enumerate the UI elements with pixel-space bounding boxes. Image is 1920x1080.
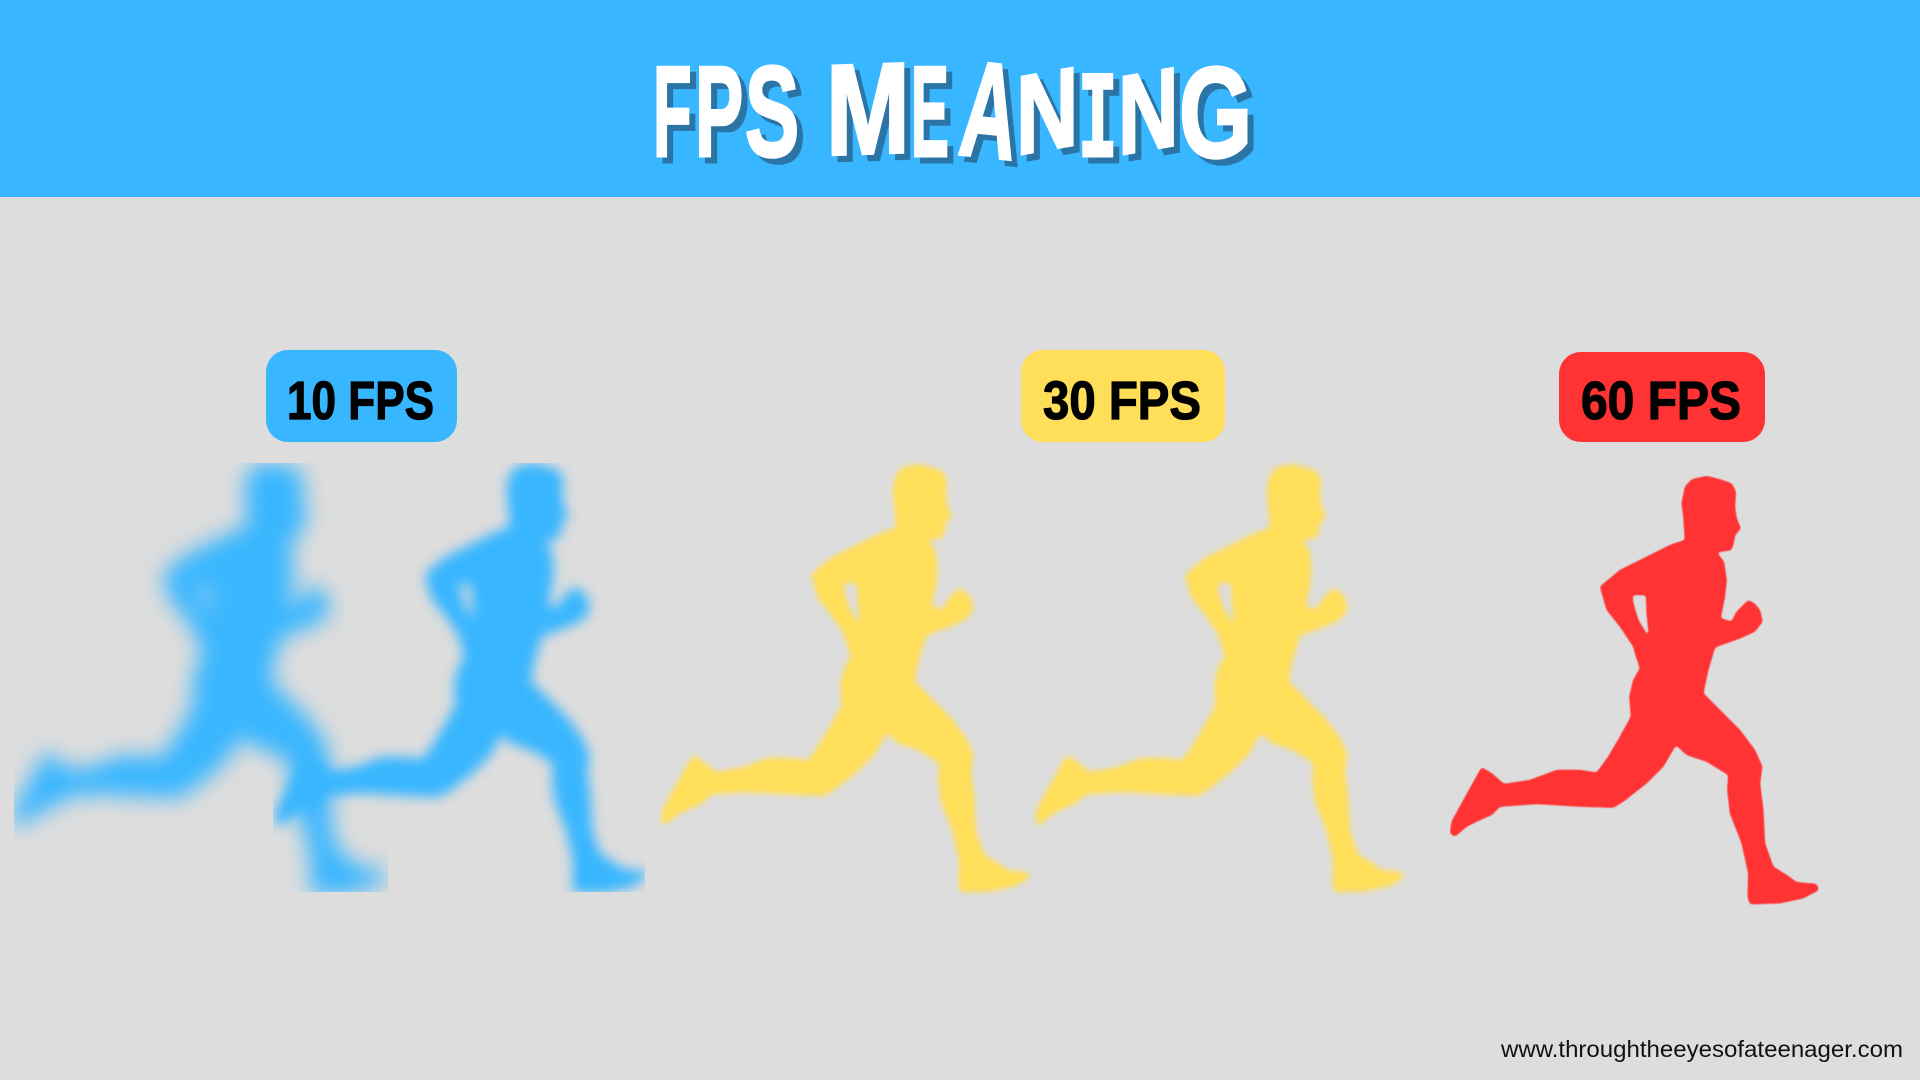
title: S [745,40,799,184]
10 FPS label [266,350,457,442]
website credit: www.throughtheeyesofateenager.com [1500,1036,1903,1062]
title [653,33,1254,193]
title: N [1016,43,1078,179]
30 FPS label: 30 FPS [1043,371,1201,431]
title: A [954,33,1025,189]
title: G [1179,41,1252,185]
30 FPS runner, first frame [661,464,1030,892]
30 FPS runner, second frame [1035,464,1404,892]
60 FPS label [1559,352,1765,442]
30 FPS label [1021,350,1225,442]
title: N [1118,44,1179,179]
60 FPS sharp runner [1450,476,1819,904]
60 FPS label: 60 FPS [1581,371,1741,431]
10 FPS blurred runner, second frame [276,464,645,892]
10 FPS label: 10 FPS [287,371,434,431]
title: P [695,40,743,184]
title: I [1078,53,1117,193]
10 FPS blurred runner, first frame [15,464,384,892]
title: F [653,40,692,184]
title: E [911,40,949,184]
header band [0,0,1920,197]
title: M [826,36,910,183]
